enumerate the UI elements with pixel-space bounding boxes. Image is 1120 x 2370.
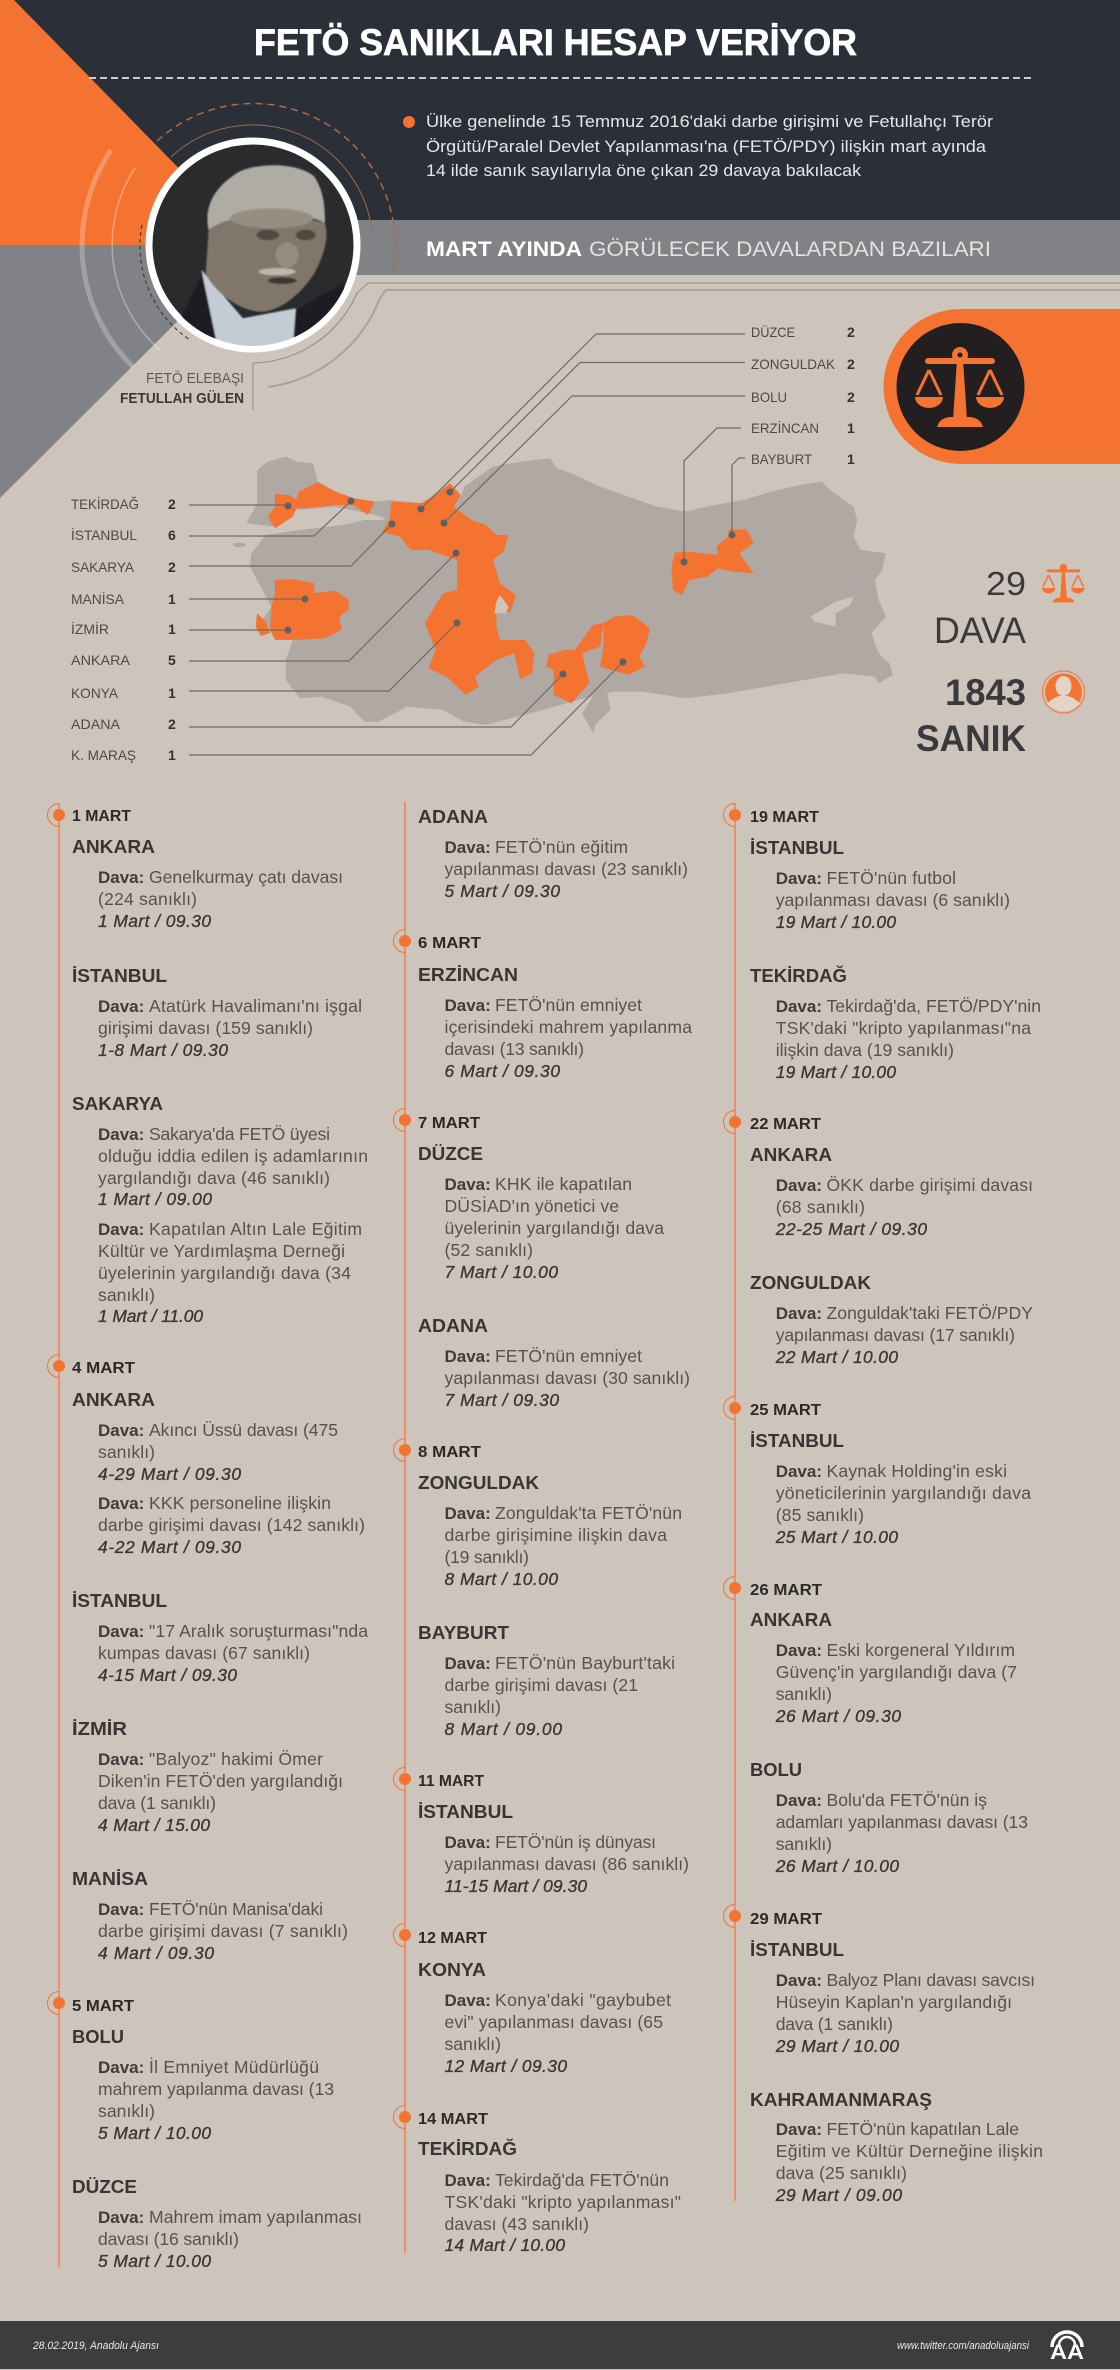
entry: Adana 7 Mart: Dava:	[444, 1347, 491, 1366]
entry: İstanbul 4 Mart: kumpas davası (67 sanıklı)	[98, 1643, 310, 1663]
entry: İstanbul 4 Mart	[72, 1590, 368, 1685]
entry: Erzincan	[418, 964, 692, 1081]
date marker: 6 Mart: 6 MART	[418, 935, 481, 952]
entry: İstanbul 25 Mart: İSTANBUL	[750, 1430, 844, 1451]
entry: Zonguldak 8 Mart: Dava:	[444, 1504, 491, 1523]
entry: Ankara 4 Mart: Dava:	[98, 1494, 144, 1513]
entry: İstanbul 11 Mart: İSTANBUL	[418, 1801, 513, 1822]
entry: Ankara 4 Mart: Dava:	[98, 1421, 144, 1440]
map labels: left: 2	[168, 716, 176, 732]
entry: Bolu: mahrem yapılanma davası (13	[98, 2079, 334, 2099]
footer	[0, 2321, 1120, 2369]
entry: Düzce: 5 Mart / 10.00	[98, 2251, 211, 2271]
map labels: right: BAYBURT	[751, 451, 812, 467]
timeline: column 3	[724, 803, 1043, 2205]
entry: Düzce: Dava:	[98, 2208, 144, 2227]
entry: Adana 5 Mart: 5 Mart / 09.30	[444, 881, 560, 901]
entry: Adana 5 Mart: ADANA	[418, 806, 488, 827]
entry: İstanbul 25 Mart: yöneticilerinin yargılandığı dava	[776, 1483, 1031, 1503]
entry: Adana 5 Mart: Dava:	[444, 838, 491, 857]
entry: İstanbul: 1-8 Mart / 09.30	[98, 1040, 228, 1060]
entry: İstanbul 25 Mart	[750, 1430, 1031, 1547]
entry: Ankara 26 Mart: sanıklı)	[776, 1684, 832, 1704]
entry: Tekirdağ 14 Mart: TEKİRDAĞ	[418, 2138, 517, 2159]
title: FETÖ SANIKLARI HESAP VERİYOR	[254, 22, 857, 63]
map labels: right: 2	[847, 389, 855, 405]
entry: Düzce 7 Mart: KHK ile kapatılan	[495, 1174, 632, 1194]
map labels: right: 1	[847, 420, 855, 436]
map of Turkey	[233, 457, 893, 733]
date marker: 26 Mart	[724, 1576, 822, 1600]
date marker: 29 Mart: 29 MART	[750, 1911, 822, 1928]
entry: Sakarya: olduğu iddia edilen iş adamlarının	[98, 1146, 368, 1166]
entry: Ankara 4 Mart: KKK personeline ilişkin	[149, 1493, 331, 1513]
map labels: right: 1	[847, 451, 855, 467]
map labels: left	[71, 495, 176, 763]
entry: Adana 5 Mart: FETÖ'nün eğitim	[495, 837, 628, 857]
entry: Ankara 22 Mart: ANKARA	[750, 1144, 832, 1165]
entry: Düzce 7 Mart: (52 sanıklı)	[444, 1240, 533, 1260]
entry: Adana 7 Mart: yapılanması davası (30 sanıklı)	[444, 1368, 690, 1388]
entry: Bolu 26 Mart: BOLU	[750, 1759, 802, 1780]
map labels: left: K. MARAŞ	[71, 747, 136, 763]
map labels: left: 1	[168, 591, 176, 607]
map labels: right	[751, 323, 855, 467]
entry: İzmir: Dava:	[98, 1750, 144, 1769]
intro text: Ülke genelinde 15 Temmuz 2016'daki darbe girişimi ve Fetullahçı Terör	[426, 112, 993, 131]
entry: Bolu: Dava:	[98, 2058, 144, 2077]
entry: Zonguldak 22 Mart: Dava:	[776, 1304, 822, 1323]
date marker: 5 Mart	[48, 1992, 134, 2015]
entry: Ankara 4 Mart: darbe girişimi davası (142 sanıklı)	[98, 1515, 365, 1535]
entry: İstanbul 4 Mart: "17 Aralık soruşturması"nda	[149, 1621, 368, 1641]
entry: Manisa: FETÖ'nün Manisa'daki	[149, 1899, 323, 1919]
map labels: left: 2	[168, 496, 176, 512]
entry: Manisa: darbe girişimi davası (7 sanıklı)	[98, 1921, 348, 1941]
entry: Ankara 22 Mart: (68 sanıklı)	[776, 1197, 865, 1217]
stat: 29 dava	[934, 564, 1085, 651]
entry: Tekirdağ 19 Mart: ilişkin dava (19 sanıklı)	[776, 1040, 954, 1060]
map dots	[284, 488, 736, 678]
entry: Zonguldak 8 Mart: ZONGULDAK	[418, 1472, 540, 1493]
entry: Ankara	[72, 836, 343, 931]
entry: Bolu: BOLU	[72, 2026, 124, 2047]
entry: Sakarya: Kapatılan Altın Lale Eğitim	[149, 1219, 362, 1239]
entry: İzmir: Diken'in FETÖ'den yargılandığı	[98, 1771, 343, 1791]
map labels: left: İZMİR	[71, 620, 109, 637]
entry: Sakarya: sanıklı)	[98, 1285, 155, 1305]
date marker: 26 Mart: 26 MART	[750, 1582, 822, 1599]
entry: Adana 7 Mart: ADANA	[418, 1315, 488, 1336]
entry: İstanbul 29 Mart: Balyoz Planı davası savcısı	[826, 1970, 1035, 1990]
entry: Zonguldak 8 Mart: 8 Mart / 10.00	[444, 1569, 558, 1589]
date marker: 22 Mart	[724, 1110, 821, 1134]
map labels: left: 5	[168, 652, 176, 668]
entry: Adana 5 Mart	[418, 806, 688, 901]
caption: Fetullah Gülen: FETÖ ELEBAŞI	[146, 369, 244, 387]
entry: İstanbul 19 Mart: FETÖ'nün futbol	[826, 868, 956, 888]
entry: Ankara 4 Mart: 4-22 Mart / 09.30	[98, 1537, 241, 1557]
map labels: right: BOLU	[751, 389, 787, 405]
entry: Sakarya: Dava:	[98, 1125, 144, 1144]
orange triangle	[0, 0, 254, 245]
entry: İzmir: 4 Mart / 15.00	[98, 1815, 210, 1835]
caption: Fetullah Gülen	[120, 369, 244, 407]
entry: Tekirdağ 14 Mart: davası (43 sanıklı)	[444, 2214, 589, 2234]
entry: Zonguldak 8 Mart: darbe girişimine ilişkin dava	[444, 1525, 667, 1545]
entry: Bayburt	[418, 1622, 675, 1739]
entry: Ankara 26 Mart: 26 Mart / 09.30	[775, 1706, 901, 1726]
entry: Zonguldak 8 Mart: (19 sanıklı)	[444, 1547, 529, 1567]
entry: Sakarya: Kültür ve Yardımlaşma Derneği	[98, 1241, 345, 1261]
entry: Bolu: İl Emniyet Müdürlüğü	[149, 2057, 319, 2077]
entry: Tekirdağ 19 Mart: TEKİRDAĞ	[750, 965, 847, 986]
map labels: right: DÜZCE	[751, 323, 795, 340]
entry: Tekirdağ 14 Mart: Tekirdağ'da FETÖ'nün	[495, 2170, 669, 2190]
date marker: 22 Mart: 22 MART	[750, 1116, 821, 1133]
map labels: left: İSTANBUL	[71, 526, 137, 543]
entry: Ankara 4 Mart: 4-29 Mart / 09.30	[98, 1464, 241, 1484]
entry: İstanbul 19 Mart: yapılanması davası (6 sanıklı)	[776, 890, 1010, 910]
date marker: 25 Mart: 25 MART	[750, 1402, 821, 1419]
entry: Düzce: davası (16 sanıklı)	[98, 2229, 239, 2249]
entry: Erzincan: davası (13 sanıklı)	[444, 1039, 584, 1059]
entry: Zonguldak 22 Mart	[750, 1272, 1033, 1367]
entry: Sakarya: 1 Mart / 11.00	[98, 1306, 203, 1326]
entry: Zonguldak 8 Mart: Zonguldak'ta FETÖ'nün	[495, 1503, 682, 1523]
entry: İstanbul 11 Mart: yapılanması davası (86 sanıklı)	[444, 1854, 689, 1874]
entry: Bolu 26 Mart: sanıklı)	[776, 1834, 832, 1854]
entry: Zonguldak 22 Mart: Zonguldak'taki FETÖ/PDY	[826, 1303, 1033, 1323]
grey band	[0, 220, 1120, 498]
entry: Zonguldak 22 Mart: ZONGULDAK	[750, 1272, 872, 1293]
stat: 29 dava: 29	[986, 565, 1026, 602]
entry: İstanbul 29 Mart: Dava:	[776, 1971, 822, 1990]
entry: Bayburt: FETÖ'nün Bayburt'taki	[495, 1653, 675, 1673]
map leader lines	[189, 334, 745, 755]
date marker: 7 Mart	[394, 1108, 480, 1132]
entry: Kahramanmaraş: dava (25 sanıklı)	[776, 2163, 907, 2183]
timeline: column 2	[394, 802, 692, 2255]
entry: Adana 7 Mart: 7 Mart / 09.30	[444, 1390, 559, 1410]
entry: Tekirdağ 14 Mart: TSK'daki "kripto yapılanması"	[444, 2192, 681, 2212]
map labels: left: MANİSA	[71, 590, 125, 607]
entry: Düzce	[72, 2176, 362, 2271]
entry: İstanbul: Dava:	[98, 997, 144, 1016]
entry: Ankara 26 Mart: Dava:	[776, 1641, 822, 1660]
entry: Düzce 7 Mart: 7 Mart / 10.00	[444, 1262, 558, 1282]
entry: Bayburt: 8 Mart / 09.00	[444, 1719, 562, 1739]
entry: Bolu 26 Mart	[750, 1759, 1028, 1876]
entry: İstanbul 25 Mart: (85 sanıklı)	[776, 1505, 864, 1525]
date marker: 14 Mart: 14 MART	[418, 2111, 488, 2128]
entry: Ankara 4 Mart: ANKARA	[72, 1389, 155, 1410]
entry: Bolu	[72, 2026, 334, 2143]
entry: İstanbul: İSTANBUL	[72, 965, 167, 986]
date marker: 19 Mart	[724, 804, 819, 826]
entry: Ankara 22 Mart: 22-25 Mart / 09.30	[775, 1219, 927, 1239]
entry: Tekirdağ 19 Mart: TSK'daki "kripto yapılanması"na	[776, 1018, 1031, 1038]
entry: İstanbul 4 Mart: İSTANBUL	[72, 1590, 167, 1611]
header band	[0, 0, 1120, 220]
icon: scales of justice	[915, 347, 1004, 427]
entry: Kahramanmaraş: 29 Mart / 09.00	[775, 2185, 902, 2205]
entry: Düzce: DÜZCE	[72, 2176, 137, 2197]
entry: İstanbul 19 Mart	[750, 837, 1010, 932]
entry: Zonguldak 22 Mart: yapılanması davası (17 sanıklı)	[776, 1325, 1015, 1345]
section heading: MART AYINDA	[426, 238, 582, 261]
date marker: 12 Mart: 12 MART	[418, 1930, 487, 1947]
footer: 28.02.2019, Anadolu Ajansı	[32, 2340, 159, 2352]
entry: Düzce: Mahrem imam yapılanması	[149, 2207, 362, 2227]
entry: İstanbul 29 Mart: Hüseyin Kaplan'n yargılandığı	[776, 1992, 1012, 2012]
map labels: left: ANKARA	[71, 652, 131, 668]
entry: İstanbul 29 Mart	[750, 1939, 1035, 2056]
entry: Tekirdağ 19 Mart	[750, 965, 1041, 1082]
date marker: 14 Mart	[394, 2106, 488, 2128]
date marker: 11 Mart: 11 MART	[418, 1773, 484, 1790]
entry: Düzce 7 Mart	[418, 1143, 664, 1282]
stat: 29 dava: DAVA	[934, 610, 1026, 651]
timeline: column 1	[48, 803, 368, 2271]
entry: Düzce 7 Mart: DÜZCE	[418, 1143, 483, 1164]
entry: Manisa: MANİSA	[72, 1868, 148, 1889]
stat: 1843 sanık	[916, 671, 1084, 759]
entry: Bayburt: BAYBURT	[418, 1622, 510, 1643]
icon: person	[1042, 671, 1084, 713]
entry: Bolu: 5 Mart / 10.00	[98, 2123, 211, 2143]
entry: Düzce 7 Mart: üyelerinin yargılandığı dava	[444, 1218, 664, 1238]
stat: 1843 sanık: SANIK	[916, 718, 1026, 759]
entry: Ankara: (224 sanıklı)	[98, 889, 197, 909]
entry: İstanbul 29 Mart: 29 Mart / 10.00	[775, 2036, 899, 2056]
entry: Manisa: 4 Mart / 09.30	[98, 1943, 214, 1963]
entry: İzmir	[72, 1718, 343, 1835]
section heading	[426, 238, 991, 261]
section heading: GÖRÜLECEK DAVALARDAN BAZILARI	[589, 238, 991, 261]
entry: Konya: Konya'daki "gaybubet	[495, 1990, 671, 2010]
entry: Ankara 4 Mart	[72, 1389, 365, 1557]
entry: İstanbul: girişimi davası (159 sanıklı)	[98, 1018, 313, 1038]
entry: Sakarya: 1 Mart / 09.00	[98, 1189, 212, 1209]
entry: Ankara 26 Mart	[750, 1609, 1017, 1726]
entry: Ankara 4 Mart: sanıklı)	[98, 1442, 155, 1462]
entry: Bolu 26 Mart: adamları yapılanması davası (13	[776, 1812, 1028, 1832]
icon: AA logo	[1050, 2332, 1084, 2364]
entry: Ankara: Dava:	[98, 868, 144, 887]
intro text: 14 ilde sanık sayılarıyla öne çıkan 29 davaya bakılacak	[426, 161, 862, 180]
entry: Ankara 22 Mart: Dava:	[776, 1176, 822, 1195]
entry: Tekirdağ 19 Mart: 19 Mart / 10.00	[776, 1062, 896, 1082]
entry: Bolu 26 Mart: Dava:	[776, 1791, 822, 1810]
date marker: 19 Mart: 19 MART	[750, 809, 819, 826]
entry: İstanbul 29 Mart: İSTANBUL	[750, 1939, 844, 1960]
date marker: 6 Mart	[394, 930, 481, 952]
entry: Ankara 26 Mart: Güvenç'in yargılandığı dava (7	[776, 1662, 1017, 1682]
portrait photo	[149, 141, 371, 353]
entry: İstanbul 11 Mart: 11-15 Mart / 09.30	[444, 1876, 587, 1896]
map labels: left: 1	[168, 747, 176, 763]
intro text	[403, 112, 993, 180]
map labels: right: ZONGULDAK	[751, 356, 836, 372]
entry: Erzincan: içerisindeki mahrem yapılanma	[444, 1017, 692, 1037]
entry: Tekirdağ 19 Mart: Tekirdağ'da, FETÖ/PDY'nin	[826, 996, 1041, 1016]
entry: İstanbul 4 Mart: Dava:	[98, 1622, 144, 1641]
entry: İzmir: "Balyoz" hakimi Ömer	[149, 1749, 323, 1769]
entry: Adana 5 Mart: yapılanması davası (23 sanıklı)	[444, 859, 688, 879]
date marker: 1 Mart: 1 MART	[72, 808, 131, 825]
entry: İstanbul 25 Mart: Dava:	[776, 1462, 822, 1481]
map labels: left: 2	[168, 559, 176, 575]
entry: İstanbul 11 Mart	[418, 1801, 689, 1896]
entry: Sakarya: Sakarya'da FETÖ üyesi	[149, 1124, 330, 1144]
entry: Tekirdağ 14 Mart: Dava:	[444, 2171, 491, 2190]
entry: İstanbul 11 Mart: Dava:	[444, 1833, 491, 1852]
entry: Ankara: Genelkurmay çatı davası	[149, 867, 343, 887]
entry: Konya: sanıklı)	[444, 2034, 501, 2054]
entry: Adana 7 Mart	[418, 1315, 690, 1410]
entry: Konya	[418, 1959, 671, 2076]
footer: www.twitter.com/anadoluajansi	[897, 2340, 1029, 2352]
date marker: 7 Mart: 7 MART	[418, 1115, 480, 1132]
entry: Bolu: sanıklı)	[98, 2101, 155, 2121]
entry: Zonguldak 22 Mart: 22 Mart / 10.00	[775, 1347, 898, 1367]
entry: Ankara 26 Mart: ANKARA	[750, 1609, 832, 1630]
entry: İstanbul	[72, 965, 362, 1060]
entry: Sakarya: yargılandığı dava (46 sanıklı)	[98, 1168, 330, 1188]
entry: Tekirdağ 19 Mart: Dava:	[776, 997, 822, 1016]
intro text: Örgütü/Paralel Devlet Yapılanması'na (FETÖ/PDY) ilişkin mart ayında	[426, 137, 987, 156]
entry: Sakarya: Dava:	[98, 1220, 144, 1239]
entry: Konya: Dava:	[444, 1991, 491, 2010]
entry: Düzce 7 Mart: Dava:	[444, 1175, 491, 1194]
map labels: left: KONYA	[71, 685, 119, 701]
entry: Zonguldak 8 Mart	[418, 1472, 682, 1589]
entry: Konya: KONYA	[418, 1959, 486, 1980]
date marker: 25 Mart	[724, 1396, 821, 1420]
entry: Ankara 4 Mart: Akıncı Üssü davası (475	[149, 1420, 338, 1440]
map labels: left: SAKARYA	[71, 559, 135, 575]
date marker: 8 Mart: 8 MART	[418, 1444, 481, 1461]
stat: 1843 sanık: 1843	[945, 672, 1026, 713]
entry: Kahramanmaraş: Eğitim ve Kültür Derneğine ilişkin	[776, 2141, 1043, 2161]
map labels: left: 6	[168, 527, 176, 543]
entry: Düzce 7 Mart: DÜSİAD'ın yönetici ve	[444, 1196, 619, 1216]
entry: Bolu 26 Mart: Bolu'da FETÖ'nün iş	[826, 1790, 987, 1810]
map labels: left: ADANA	[71, 716, 121, 732]
entry: Kahramanmaraş: FETÖ'nün kapatılan Lale	[826, 2119, 1019, 2139]
entry: Ankara 22 Mart	[750, 1144, 1033, 1239]
date marker: 11 Mart	[394, 1768, 484, 1790]
caption: Fetullah Gülen: FETULLAH GÜLEN	[120, 390, 244, 407]
entry: Ankara 22 Mart: ÖKK darbe girişimi davası	[826, 1175, 1033, 1195]
orange badge with scales	[884, 309, 1120, 464]
map labels: left: 1	[168, 685, 176, 701]
entry: Konya: evi" yapılanması davası (65	[444, 2012, 663, 2032]
entry: İstanbul 25 Mart: 25 Mart / 10.00	[775, 1527, 898, 1547]
entry: İstanbul 11 Mart: FETÖ'nün iş dünyası	[495, 1832, 656, 1852]
icon: small scales	[1042, 564, 1085, 602]
entry: İstanbul 19 Mart: 19 Mart / 10.00	[776, 912, 896, 932]
date marker: 1 Mart	[48, 804, 131, 826]
entry: Ankara: 1 Mart / 09.30	[98, 911, 211, 931]
entry: Konya: 12 Mart / 09.30	[444, 2056, 567, 2076]
entry: İstanbul 19 Mart: Dava:	[776, 869, 822, 888]
entry: Tekirdağ 14 Mart	[418, 2138, 681, 2255]
map labels: right: ERZİNCAN	[751, 419, 819, 436]
date marker: 5 Mart: 5 MART	[72, 1998, 134, 2015]
entry: Sakarya: SAKARYA	[72, 1093, 163, 1114]
map labels: left: 1	[168, 621, 176, 637]
entry: Ankara: ANKARA	[72, 836, 155, 857]
date marker: 4 Mart	[48, 1354, 135, 1378]
entry: İstanbul 19 Mart: İSTANBUL	[750, 837, 844, 858]
entry: Erzincan: 6 Mart / 09.30	[444, 1061, 560, 1081]
entry: Tekirdağ 14 Mart: 14 Mart / 10.00	[444, 2235, 565, 2255]
entry: Kahramanmaraş	[750, 2089, 1043, 2205]
entry: Kahramanmaraş: Dava:	[776, 2120, 822, 2139]
entry: İstanbul 25 Mart: Kaynak Holding'in eski	[826, 1461, 1007, 1481]
entry: İstanbul 29 Mart: dava (1 sanıklı)	[776, 2014, 893, 2034]
entry: İzmir: dava (1 sanıklı)	[98, 1793, 216, 1813]
date marker: 29 Mart	[724, 1904, 822, 1928]
map labels: right: 2	[847, 356, 855, 372]
entry: Adana 7 Mart: FETÖ'nün emniyet	[495, 1346, 642, 1366]
entry: Manisa	[72, 1868, 348, 1963]
date marker: 8 Mart	[394, 1438, 481, 1462]
map labels: right: 2	[847, 324, 855, 340]
entry: Bayburt: darbe girişimi davası (21	[444, 1675, 638, 1695]
entry: Erzincan: FETÖ'nün emniyet	[495, 995, 642, 1015]
entry: Erzincan: ERZİNCAN	[418, 964, 518, 985]
entry: İzmir: İZMİR	[72, 1718, 127, 1739]
entry: Sakarya	[72, 1093, 368, 1326]
entry: İstanbul 4 Mart: 4-15 Mart / 09.30	[98, 1665, 237, 1685]
map labels: left: TEKİRDAĞ	[71, 495, 139, 512]
entry: Erzincan: Dava:	[444, 996, 491, 1015]
entry: Bayburt: Dava:	[444, 1654, 491, 1673]
entry: Kahramanmaraş: KAHRAMANMARAŞ	[750, 2089, 932, 2110]
entry: Bayburt: sanıklı)	[444, 1697, 501, 1717]
entry: Bolu 26 Mart: 26 Mart / 10.00	[775, 1856, 899, 1876]
date marker: 4 Mart: 4 MART	[72, 1360, 135, 1377]
entry: Ankara 26 Mart: Eski korgeneral Yıldırım	[826, 1640, 1015, 1660]
entry: İstanbul: Atatürk Havalimanı'nı işgal	[149, 996, 362, 1016]
entry: Manisa: Dava:	[98, 1900, 144, 1919]
entry: Sakarya: üyelerinin yargılandığı dava (34	[98, 1263, 351, 1283]
date marker: 12 Mart	[394, 1924, 487, 1947]
icon: AA logo: AA	[1050, 2341, 1084, 2364]
